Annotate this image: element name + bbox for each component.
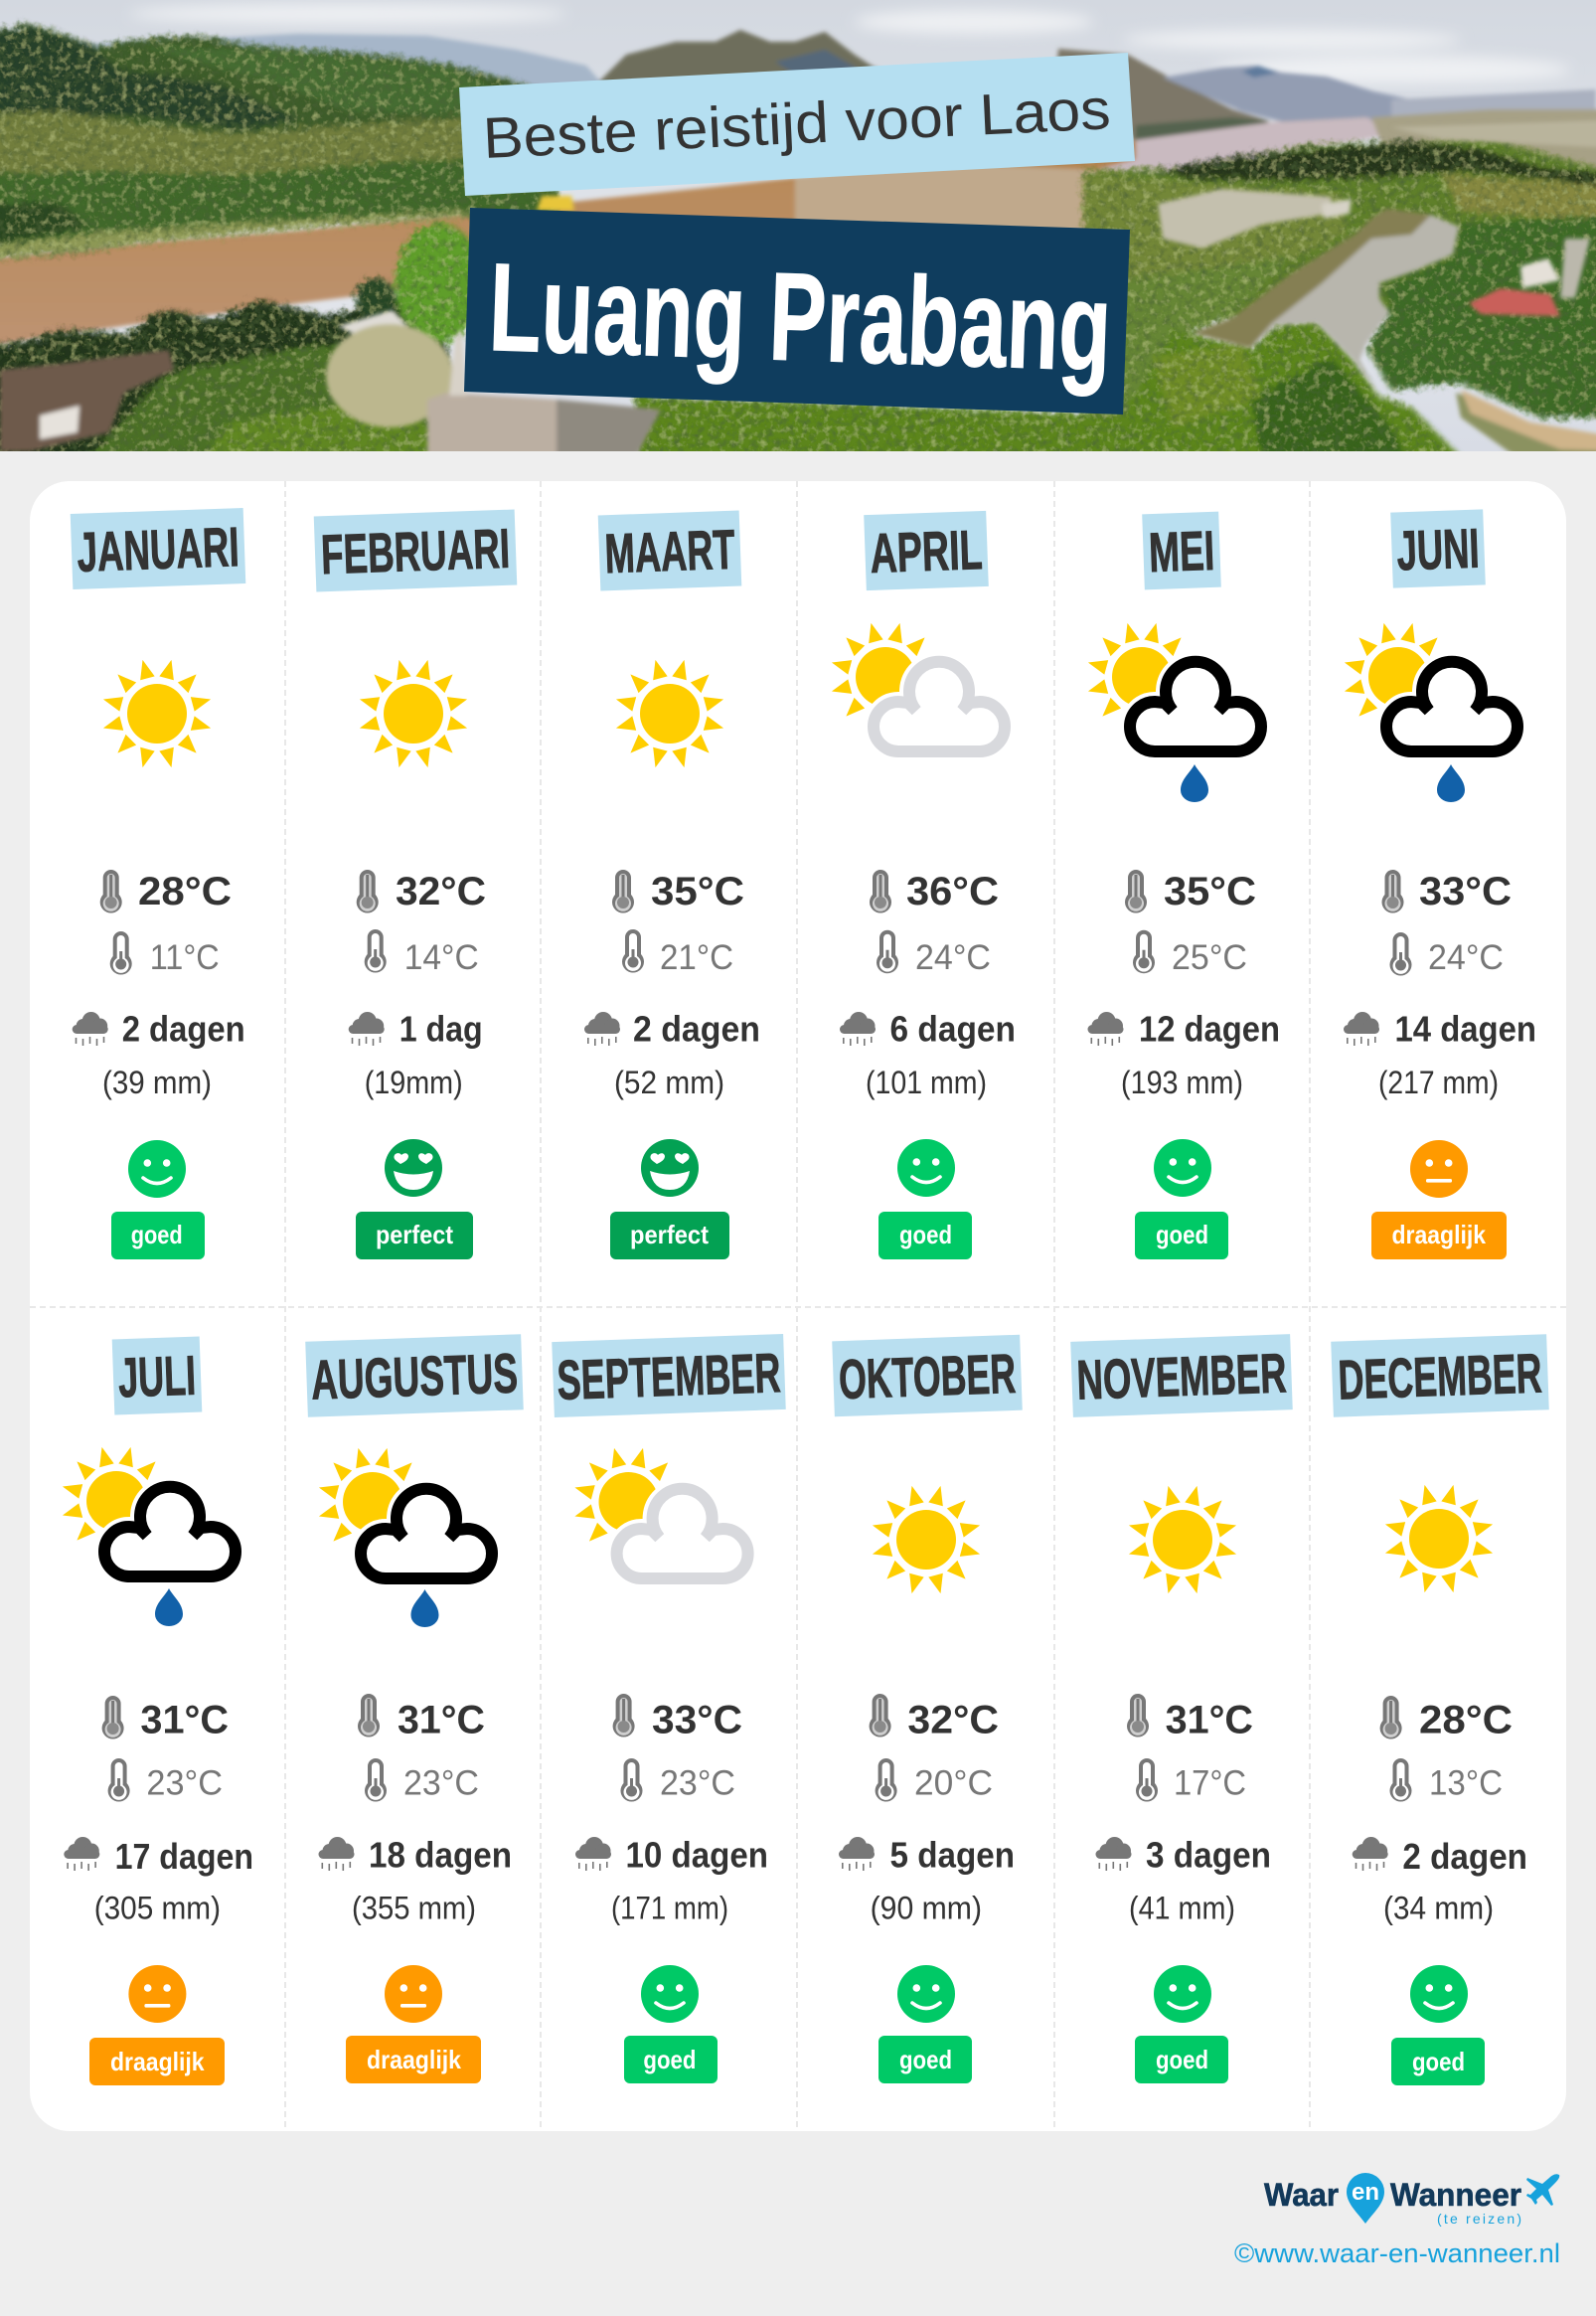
rain days	[839, 1835, 1015, 1876]
icon: sun	[358, 658, 469, 769]
icon: sun	[1127, 1484, 1238, 1595]
rain days: 2 dagen	[122, 1008, 245, 1050]
high temperature: 31°C	[398, 1698, 485, 1741]
logo: Waar en Wanneer: (te reizen)	[1437, 2211, 1521, 2227]
low temperature: 24°C	[1428, 938, 1504, 977]
high temperature: 28°C	[1419, 1698, 1513, 1741]
icon: mood	[385, 1139, 442, 1197]
high temperature	[357, 870, 486, 913]
badge	[1391, 2038, 1485, 2085]
high temperature: 36°C	[906, 870, 999, 913]
rain days: 2 dagen	[633, 1008, 760, 1050]
low temperature: 13°C	[1429, 1764, 1503, 1803]
rainfall: (217 mm)	[1378, 1065, 1499, 1100]
heading: maart	[598, 511, 741, 590]
low temperature	[876, 1758, 993, 1803]
heading: juli: JULI	[117, 1344, 197, 1408]
icon: partly cloudy	[572, 1446, 748, 1578]
badge: goed	[1156, 1220, 1208, 1249]
heading: september: SEPTEMBER	[556, 1341, 782, 1411]
low temperature	[365, 929, 479, 977]
rainfall: (305 mm)	[94, 1891, 221, 1926]
rainfall: (19mm)	[365, 1065, 463, 1100]
rain days	[1344, 1008, 1536, 1050]
badge: perfect	[630, 1220, 709, 1249]
high temperature: 33°C	[652, 1698, 742, 1741]
high temperature	[870, 870, 999, 913]
rainfall: (41 mm)	[1129, 1891, 1235, 1926]
low temperature	[1133, 930, 1247, 977]
low temperature: 23°C	[403, 1764, 479, 1803]
icon: partly cloudy	[830, 621, 1005, 751]
low temperature: 20°C	[914, 1764, 993, 1803]
icon: mood	[128, 1140, 186, 1198]
badge: draaglijk	[1391, 1220, 1486, 1249]
low temperature: 17°C	[1174, 1764, 1246, 1803]
logo: Waar en Wanneer	[1264, 2173, 1559, 2227]
logo: Waar en Wanneer: Waar	[1264, 2177, 1339, 2213]
rain days	[584, 1008, 760, 1050]
badge: draaglijk	[367, 2045, 461, 2074]
icon: mood	[1154, 1139, 1211, 1197]
icon: airplane	[1526, 2174, 1559, 2206]
hero photo: Luang Prabang river landscape	[0, 0, 1596, 467]
icon: mood	[1154, 1965, 1211, 2023]
rain days: 17 dagen	[115, 1836, 253, 1877]
high temperature: 35°C	[1164, 870, 1256, 913]
low temperature	[1136, 1758, 1246, 1803]
panel: augustus	[305, 1334, 524, 2083]
website url: ©www.waar-en-wanneer.nl	[1234, 2238, 1560, 2268]
low temperature: 21°C	[660, 938, 733, 977]
icon: mood	[897, 1965, 955, 2023]
badge: goed	[899, 2045, 952, 2074]
panel: mei	[1086, 512, 1280, 1259]
low temperature: 25°C	[1172, 938, 1247, 977]
high temperature	[613, 1694, 742, 1741]
subtitle banner: Beste reistijd voor Laos	[482, 77, 1112, 171]
heading: mei: MEI	[1148, 519, 1215, 583]
badge	[610, 1212, 729, 1259]
rainfall: (52 mm)	[614, 1065, 724, 1100]
heading: januari: JANUARI	[76, 515, 240, 583]
badge	[1135, 1212, 1228, 1259]
low temperature: 11°C	[150, 938, 220, 977]
heading: oktober	[832, 1335, 1023, 1416]
badge	[624, 2036, 718, 2083]
panel: februari	[314, 509, 517, 1259]
rainfall: (34 mm)	[1383, 1891, 1494, 1926]
high temperature: 28°C	[138, 870, 232, 913]
high temperature	[100, 870, 232, 913]
low temperature	[108, 1758, 223, 1803]
high temperature	[870, 1694, 999, 1741]
badge: goed	[131, 1220, 183, 1249]
subtitle banner	[459, 53, 1135, 196]
rain days: 6 dagen	[890, 1008, 1016, 1050]
rain days	[575, 1835, 768, 1876]
heading: april: APRIL	[869, 518, 984, 584]
low temperature	[1389, 932, 1504, 977]
high temperature: 32°C	[907, 1698, 999, 1741]
icon: mood	[897, 1139, 955, 1197]
low temperature	[620, 1758, 735, 1803]
badge	[89, 2038, 225, 2085]
rain days	[1353, 1836, 1527, 1877]
rain days	[1095, 1835, 1271, 1876]
icon: sun	[871, 1484, 982, 1595]
title banner: Luang Prabang	[487, 237, 1113, 398]
heading: augustus: AUGUSTUS	[310, 1341, 519, 1411]
high temperature	[102, 1696, 229, 1741]
badge	[356, 1212, 473, 1259]
high temperature: 33°C	[1419, 870, 1512, 913]
high temperature	[612, 870, 744, 913]
rain days: 18 dagen	[369, 1835, 512, 1876]
badge: goed	[643, 2045, 696, 2074]
heading: juni: JUNI	[1395, 517, 1481, 581]
high temperature	[358, 1694, 485, 1741]
badge	[878, 1212, 972, 1259]
high temperature: 31°C	[1166, 1698, 1253, 1741]
badge: goed	[1156, 2045, 1208, 2074]
icon: sun	[614, 658, 725, 769]
badge: draaglijk	[110, 2047, 205, 2076]
badge: goed	[899, 1220, 952, 1249]
low temperature: 23°C	[660, 1764, 735, 1803]
badge: goed	[1412, 2047, 1465, 2076]
rainfall: (171 mm)	[611, 1891, 728, 1926]
low temperature: 14°C	[404, 938, 479, 977]
rainfall: (39 mm)	[102, 1065, 212, 1100]
rain days	[73, 1008, 245, 1050]
rain days	[318, 1835, 512, 1876]
heading: februari	[314, 509, 517, 592]
rain days: 1 dag	[399, 1008, 483, 1050]
low temperature	[877, 930, 991, 977]
badge	[346, 2036, 481, 2083]
panel: oktober	[832, 1335, 1023, 2083]
low temperature: 24°C	[915, 938, 991, 977]
panel: april	[830, 511, 1016, 1259]
rain days	[840, 1008, 1016, 1050]
panel: december	[1331, 1334, 1549, 2085]
rain days	[1087, 1008, 1280, 1050]
title banner	[464, 208, 1130, 414]
panel: september	[552, 1334, 786, 2083]
rainfall: (101 mm)	[866, 1065, 987, 1100]
high temperature: 31°C	[140, 1698, 229, 1741]
icon: mood	[1410, 1140, 1468, 1198]
high temperature: 35°C	[651, 870, 744, 913]
icon: rain cloud with sun	[61, 1445, 236, 1626]
rain days: 10 dagen	[626, 1835, 768, 1876]
high temperature	[1125, 870, 1256, 913]
rain days: 12 dagen	[1139, 1008, 1280, 1050]
heading: september	[552, 1334, 786, 1417]
heading: juli	[112, 1336, 202, 1415]
icon: rain cloud with sun	[317, 1446, 492, 1627]
high temperature: 32°C	[396, 870, 486, 913]
high temperature	[1381, 870, 1512, 913]
panel: november	[1070, 1334, 1293, 2083]
icon: rain cloud with sun	[1086, 621, 1261, 802]
high temperature	[1127, 1694, 1253, 1741]
panel: monthly climate card	[30, 481, 1566, 2131]
badge	[878, 2036, 972, 2083]
heading: mei	[1142, 512, 1221, 589]
icon: location pin	[1347, 2173, 1384, 2224]
rain days: 14 dagen	[1395, 1008, 1536, 1050]
panel: maart	[584, 511, 760, 1259]
heading: augustus	[305, 1334, 524, 1417]
heading: november: NOVEMBER	[1075, 1341, 1288, 1411]
rain days: 3 dagen	[1146, 1835, 1271, 1876]
rain days	[349, 1008, 483, 1050]
panel: juni	[1343, 509, 1536, 1259]
icon: mood	[128, 1965, 186, 2023]
rainfall: (193 mm)	[1121, 1065, 1243, 1100]
heading: oktober: OKTOBER	[838, 1342, 1017, 1410]
low temperature	[365, 1758, 479, 1803]
heading: maart: MAART	[603, 518, 736, 584]
heading: november	[1070, 1334, 1293, 1417]
icon: location pin: en	[1352, 2179, 1379, 2206]
heading: februari: FEBRUARI	[320, 517, 511, 585]
heading: januari	[71, 508, 245, 589]
badge	[111, 1212, 205, 1259]
panel: januari	[71, 508, 245, 1259]
rainfall: (90 mm)	[871, 1891, 982, 1926]
low temperature: 23°C	[146, 1764, 223, 1803]
rain days: 5 dagen	[890, 1835, 1015, 1876]
badge	[1135, 2036, 1228, 2083]
icon: sun	[101, 658, 213, 769]
badge	[1371, 1212, 1507, 1259]
icon: mood	[641, 1139, 699, 1197]
high temperature	[1380, 1696, 1513, 1741]
heading: juni	[1390, 509, 1486, 588]
rain days: 2 dagen	[1402, 1836, 1527, 1877]
icon: mood	[385, 1965, 442, 2023]
icon: sun	[1383, 1483, 1495, 1594]
low temperature	[1389, 1758, 1503, 1803]
icon: mood	[1410, 1965, 1468, 2023]
icon: mood	[641, 1965, 699, 2023]
rainfall: (355 mm)	[352, 1891, 476, 1926]
rain days	[64, 1836, 253, 1877]
icon: rain cloud with sun	[1343, 621, 1517, 802]
low temperature	[110, 931, 220, 977]
badge: perfect	[376, 1220, 453, 1249]
heading: april	[864, 511, 989, 590]
panel: juli	[61, 1336, 253, 2085]
logo: Waar en Wanneer: Wanneer	[1390, 2177, 1521, 2213]
low temperature	[622, 929, 733, 977]
